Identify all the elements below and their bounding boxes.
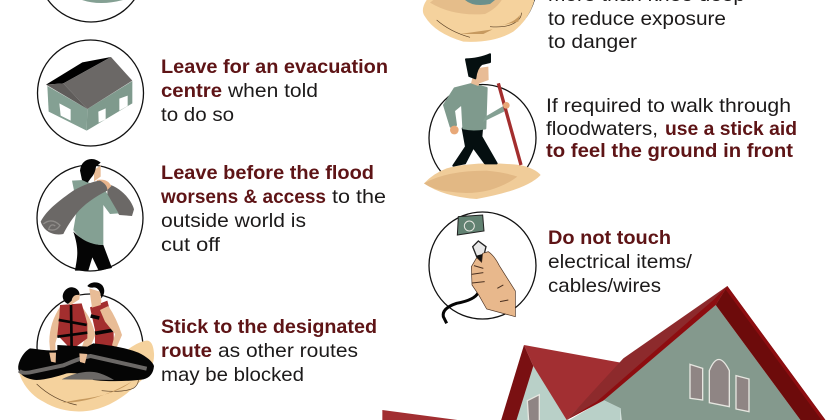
text: stick to the designated route: route — [161, 340, 212, 362]
text: leave before the flood worsens: outside world is — [161, 210, 306, 232]
text: do not touch: Do not touch — [548, 227, 671, 249]
text: use a stick aid: use a stick aid — [665, 118, 797, 140]
text: wade no more than knee deep: to reduce exposure — [548, 8, 726, 30]
text: stick to the designated route: may be blocked — [161, 364, 304, 386]
text: leave before the flood worsens: Leave before the flood — [161, 162, 374, 184]
text: leave before the flood worsens: to the — [332, 186, 386, 208]
text: leave for an evacuation centre: to do so — [161, 104, 234, 126]
text: do not touch: electrical items/ — [548, 251, 693, 273]
text: leave for an evacuation centre: Leave for an evacuation — [161, 56, 388, 78]
text: use a stick aid — [546, 95, 797, 162]
icon: house in circle — [38, 40, 144, 146]
text: use a stick aid: If required to walk through — [546, 95, 791, 117]
icon: person walking with stick — [424, 54, 541, 199]
illustration: house with red roof — [382, 286, 827, 420]
text: stick to the designated route: as other routes — [218, 340, 358, 362]
text: use a stick aid: floodwaters, — [546, 118, 658, 140]
text: stick to the designated route: Stick to the designated — [161, 316, 377, 338]
text: leave before the flood worsens: cut off — [161, 234, 221, 256]
icon: cropped circle with sand top right — [423, 0, 536, 42]
text: leave before the flood worsens — [160, 162, 386, 256]
text: wade no more than knee deep: to danger — [548, 31, 638, 53]
text: wade no more than knee deep — [548, 0, 745, 53]
icon: person carrying rolled mat — [37, 159, 143, 271]
text: leave for an evacuation centre: centre — [161, 80, 222, 102]
icon: cropped circle top left — [38, 0, 144, 22]
text: stick to the designated route — [161, 316, 377, 386]
text: do not touch: cables/wires — [548, 275, 661, 297]
icon: hand holding plug near socket — [429, 212, 536, 323]
text: leave before the flood worsens: worsens & access — [160, 186, 326, 208]
text: leave for an evacuation centre: when told — [227, 80, 318, 102]
text: do not touch — [548, 227, 693, 297]
text: leave for an evacuation centre — [161, 56, 388, 126]
text: use a stick aid: to feel the ground in front — [546, 140, 794, 162]
icon: two people in inflatable raft — [18, 282, 154, 411]
